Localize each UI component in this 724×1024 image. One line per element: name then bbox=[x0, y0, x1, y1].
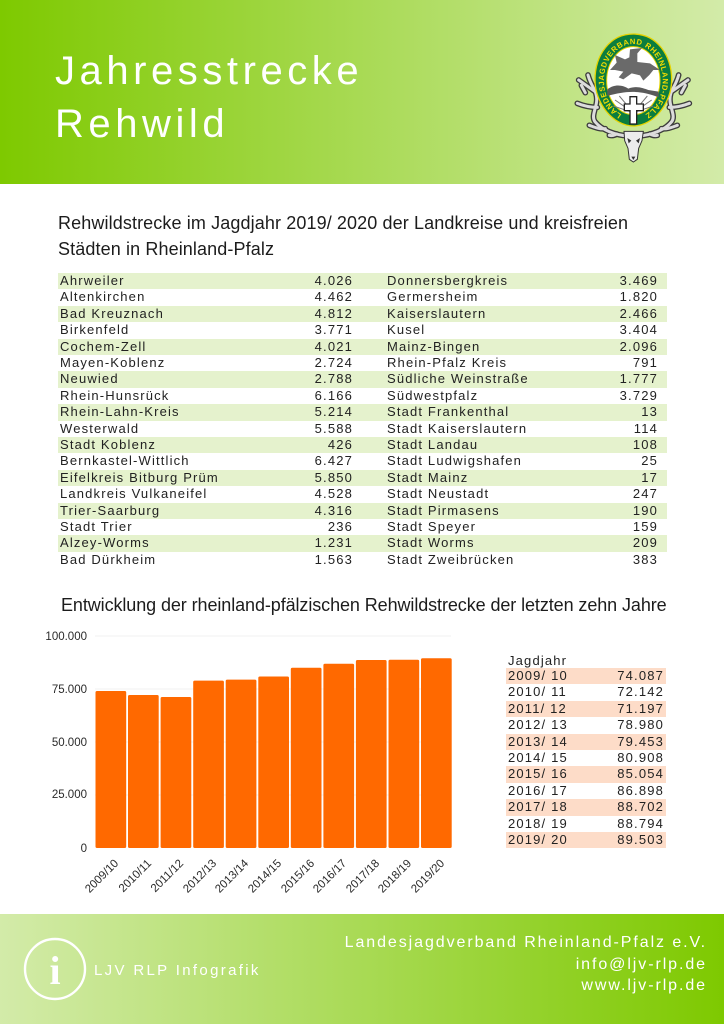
table: districts: 5.588 bbox=[315, 421, 353, 436]
title: Rehwild bbox=[55, 102, 229, 146]
table: yearly totals bbox=[506, 653, 666, 848]
table: districts: 2.466 bbox=[620, 306, 658, 321]
y axis labels: 0 bbox=[81, 843, 87, 855]
table: districts: 108 bbox=[633, 437, 658, 452]
table: districts: Trier-Saarburg bbox=[60, 503, 160, 518]
table: yearly totals: 2009/ 10 bbox=[508, 668, 568, 683]
x axis labels: 2017/18 bbox=[344, 858, 382, 896]
table: yearly totals: 71.197 bbox=[617, 701, 664, 716]
skull bbox=[624, 131, 643, 162]
table: districts: 114 bbox=[634, 421, 658, 436]
table: districts: 6.166 bbox=[315, 388, 353, 403]
rider bbox=[610, 48, 660, 81]
table: districts: Stadt Koblenz bbox=[60, 437, 156, 452]
table: yearly totals: 2012/ 13 bbox=[508, 717, 568, 732]
heading: district table: Rehwildstrecke im Jagdjahr 2019/ 2020 der Landkreise und kreisfreien bbox=[58, 213, 628, 233]
table: districts: Westerwald bbox=[60, 421, 139, 436]
table: districts: 4.462 bbox=[315, 289, 353, 304]
table: districts: 3.469 bbox=[620, 273, 658, 288]
table: yearly totals: 80.908 bbox=[617, 750, 664, 765]
table: yearly totals: Jagdjahr bbox=[508, 653, 567, 668]
table: districts: Stadt Speyer bbox=[387, 519, 476, 534]
table: yearly totals: 2014/ 15 bbox=[508, 750, 568, 765]
table: districts: Eifelkreis Bitburg Prüm bbox=[60, 470, 219, 485]
table: yearly totals: 79.453 bbox=[617, 734, 664, 749]
table: districts: Stadt Trier bbox=[60, 519, 133, 534]
ring bbox=[595, 34, 672, 126]
bar chart bbox=[45, 631, 452, 896]
table: districts: 159 bbox=[633, 519, 658, 534]
table: districts: 4.021 bbox=[315, 339, 353, 354]
table: districts: 17 bbox=[641, 470, 658, 485]
table: districts: 2.788 bbox=[315, 371, 353, 386]
table: districts: Donnersbergkreis bbox=[387, 273, 508, 288]
table: yearly totals: 78.980 bbox=[617, 717, 664, 732]
table: districts: 2.096 bbox=[620, 339, 658, 354]
table: districts: Rhein-Lahn-Kreis bbox=[60, 404, 180, 419]
table: districts: Birkenfeld bbox=[60, 322, 129, 337]
footer label: LJV RLP Infografik bbox=[94, 962, 261, 979]
x axis labels: 2019/20 bbox=[409, 858, 447, 896]
x axis labels: 2014/15 bbox=[246, 858, 284, 896]
table: districts: 1.563 bbox=[315, 552, 353, 567]
table: districts: Stadt Zweibrücken bbox=[387, 552, 514, 567]
table: districts: Altenkirchen bbox=[60, 289, 145, 304]
table: districts: Rhein-Hunsrück bbox=[60, 388, 169, 403]
table: districts: 791 bbox=[633, 355, 658, 370]
table: yearly totals: 89.503 bbox=[617, 832, 664, 847]
table: districts: Stadt Kaiserslautern bbox=[387, 421, 527, 436]
table: districts: Mainz-Bingen bbox=[387, 339, 480, 354]
landscape bbox=[607, 85, 659, 97]
y axis labels: 100.000 bbox=[45, 631, 87, 643]
table: districts: Germersheim bbox=[387, 289, 478, 304]
table: districts: Kaiserslautern bbox=[387, 306, 486, 321]
table: districts: 190 bbox=[633, 503, 658, 518]
table: districts: Bad Kreuznach bbox=[60, 306, 164, 321]
x axis labels: 2011/12 bbox=[149, 858, 186, 895]
table: yearly totals: 2010/ 11 bbox=[508, 684, 567, 699]
table: districts: 3.404 bbox=[620, 322, 658, 337]
table: districts: 2.724 bbox=[315, 355, 353, 370]
table: districts: 236 bbox=[328, 519, 353, 534]
table: yearly totals: 2018/ 19 bbox=[508, 816, 568, 831]
table: districts: 209 bbox=[633, 535, 658, 550]
table: districts: Südliche Weinstraße bbox=[387, 371, 529, 386]
icon: info bbox=[24, 938, 86, 1000]
table: yearly totals: 2017/ 18 bbox=[508, 799, 568, 814]
y axis labels bbox=[45, 631, 87, 855]
table: districts: Neuwied bbox=[60, 371, 119, 386]
x axis labels: 2012/13 bbox=[181, 858, 219, 896]
title: Jahresstrecke bbox=[55, 49, 363, 93]
table: districts: Rhein-Pfalz Kreis bbox=[387, 355, 507, 370]
table: districts: 3.729 bbox=[620, 388, 658, 403]
table: districts: Stadt Landau bbox=[387, 437, 478, 452]
ring lettering: LANDESJAGDVERBAND RHEINLAND-PFALZ bbox=[598, 38, 668, 119]
icon: LJV logo bbox=[574, 33, 692, 163]
table: districts: 1.777 bbox=[620, 371, 658, 386]
x axis labels: 2015/16 bbox=[279, 858, 317, 896]
table: yearly totals: 2013/ 14 bbox=[508, 734, 568, 749]
table: yearly totals: 88.702 bbox=[617, 799, 664, 814]
table: districts: 1.231 bbox=[315, 535, 353, 550]
heading: development: Entwicklung der rheinland-pfälzischen Rehwildstrecke der letzten zehn Jahre bbox=[61, 595, 667, 615]
title bbox=[55, 49, 363, 146]
footer contact: info@ljv-rlp.de bbox=[576, 956, 707, 973]
table: districts: 5.214 bbox=[315, 404, 353, 419]
table: districts: Kusel bbox=[387, 322, 425, 337]
table: districts: Alzey-Worms bbox=[60, 535, 150, 550]
table: districts: Bernkastel-Wittlich bbox=[60, 453, 190, 468]
table: districts: 13 bbox=[641, 404, 658, 419]
shield bbox=[607, 47, 660, 115]
table: districts: Stadt Frankenthal bbox=[387, 404, 509, 419]
table: districts: Stadt Worms bbox=[387, 535, 475, 550]
footer band bbox=[0, 914, 724, 1024]
table: districts: Ahrweiler bbox=[60, 273, 125, 288]
table: districts: 247 bbox=[633, 486, 658, 501]
cross bbox=[624, 97, 643, 124]
table: yearly totals: 88.794 bbox=[617, 816, 664, 831]
table: districts: 4.026 bbox=[315, 273, 353, 288]
footer contact: www.ljv-rlp.de bbox=[581, 977, 707, 994]
table: districts: 4.316 bbox=[315, 503, 353, 518]
bars bbox=[96, 658, 452, 848]
x axis labels: 2010/11 bbox=[117, 858, 154, 895]
y axis labels: 25.000 bbox=[52, 789, 87, 801]
table: districts: 5.850 bbox=[315, 470, 353, 485]
table: districts: 6.427 bbox=[315, 453, 353, 468]
table: yearly totals: 86.898 bbox=[617, 783, 664, 798]
heading: district table bbox=[58, 213, 628, 259]
table: districts: Bad Dürkheim bbox=[60, 552, 156, 567]
table: yearly totals: 2015/ 16 bbox=[508, 766, 568, 781]
table: districts: 4.812 bbox=[315, 306, 353, 321]
table: yearly totals: 2019/ 20 bbox=[508, 832, 568, 847]
table: yearly totals: 72.142 bbox=[617, 684, 664, 699]
table: districts: 25 bbox=[641, 453, 658, 468]
table: yearly totals: 2016/ 17 bbox=[508, 783, 568, 798]
footer contact bbox=[345, 934, 707, 994]
footer contact: Landesjagdverband Rheinland-Pfalz e.V. bbox=[345, 934, 707, 951]
table: districts: 383 bbox=[633, 552, 658, 567]
table: districts: Stadt Ludwigshafen bbox=[387, 453, 522, 468]
table: districts: Cochem-Zell bbox=[60, 339, 146, 354]
header band bbox=[0, 0, 724, 184]
table: districts: 3.771 bbox=[315, 322, 353, 337]
heading: district table: Städten in Rheinland-Pfalz bbox=[58, 239, 274, 259]
x axis labels: 2009/10 bbox=[83, 858, 121, 896]
sun rays bbox=[613, 96, 653, 113]
y axis labels: 75.000 bbox=[52, 684, 87, 696]
x axis labels: 2018/19 bbox=[376, 858, 414, 896]
antlers bbox=[577, 75, 689, 136]
x axis labels bbox=[83, 857, 447, 896]
table: districts: Stadt Neustadt bbox=[387, 486, 489, 501]
table: districts: Stadt Pirmasens bbox=[387, 503, 500, 518]
table: districts bbox=[58, 273, 667, 567]
table: yearly totals: 74.087 bbox=[617, 668, 664, 683]
y axis labels: 50.000 bbox=[52, 737, 87, 749]
table: districts: Landkreis Vulkaneifel bbox=[60, 486, 207, 501]
table: districts: Südwestpfalz bbox=[387, 388, 478, 403]
table: districts: Stadt Mainz bbox=[387, 470, 468, 485]
x axis labels: 2016/17 bbox=[311, 858, 349, 896]
table: yearly totals: 2011/ 12 bbox=[508, 701, 567, 716]
icon: info: i bbox=[49, 948, 61, 993]
table: districts: 426 bbox=[328, 437, 353, 452]
table: districts: 4.528 bbox=[315, 486, 353, 501]
x axis labels: 2013/14 bbox=[213, 857, 252, 896]
table: districts: 1.820 bbox=[620, 289, 658, 304]
table: yearly totals: 85.054 bbox=[617, 766, 664, 781]
table: districts: Mayen-Koblenz bbox=[60, 355, 165, 370]
